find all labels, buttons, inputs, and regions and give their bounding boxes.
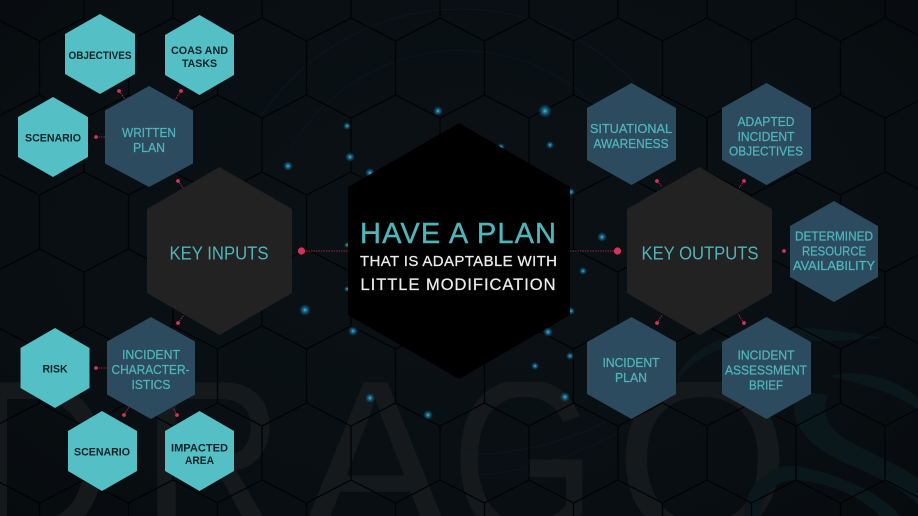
incident assessment brief: [722, 317, 811, 419]
incident characteristics: ISTICS: [132, 378, 170, 392]
adapted incident objectives: [722, 83, 811, 185]
adapted incident objectives: ADAPTED: [738, 115, 794, 129]
objectives: [65, 14, 135, 94]
watermark: DRAGO wordmark: [0, 382, 790, 516]
scenario (written plan): SCENARIO: [25, 132, 81, 144]
incident assessment brief: ASSESSMENT: [725, 364, 807, 378]
determined resource availability: AVAILABILITY: [793, 259, 876, 273]
central subheading: [360, 253, 557, 294]
objectives: OBJECTIVES: [68, 50, 132, 62]
watermark: dragon emblem: [677, 328, 918, 516]
connectors: [96, 91, 744, 415]
scenario (written plan): [18, 97, 88, 177]
incident characteristics: INCIDENT: [122, 348, 180, 362]
incident characteristics: CHARACTER-: [112, 363, 190, 377]
incident assessment brief: INCIDENT: [738, 348, 795, 362]
risk: [20, 328, 90, 408]
incident plan: PLAN: [615, 371, 647, 385]
panel: key outputs: [627, 167, 772, 335]
adapted incident objectives: OBJECTIVES: [729, 144, 803, 158]
incident assessment brief: BRIEF: [749, 378, 783, 392]
written plan: [105, 86, 193, 187]
glowing particles: [283, 104, 607, 420]
panel: key outputs: KEY OUTPUTS: [642, 244, 758, 264]
faint concentric arcs: [262, 9, 660, 475]
situational awareness: [587, 83, 676, 185]
impacted area: [165, 411, 234, 491]
determined resource availability: DETERMINED: [795, 230, 873, 244]
determined resource availability: RESOURCE: [802, 244, 866, 258]
coas and tasks: [165, 15, 234, 95]
scenario (incident): SCENARIO: [74, 446, 130, 458]
risk: RISK: [42, 364, 68, 376]
connector dots: [94, 89, 786, 417]
coas and tasks: COAS AND: [171, 45, 228, 57]
coas and tasks: TASKS: [182, 58, 217, 70]
scenario (incident): [68, 411, 137, 491]
adapted incident objectives: INCIDENT: [738, 130, 795, 144]
written plan: WRITTEN: [122, 126, 176, 140]
impacted area: IMPACTED: [171, 442, 228, 454]
impacted area: AREA: [185, 455, 214, 467]
incident plan: [587, 317, 676, 419]
incident plan: INCIDENT: [602, 356, 660, 370]
situational awareness: SITUATIONAL: [590, 122, 672, 136]
central subheading: THAT IS ADAPTABLE WITH: [360, 253, 557, 270]
panel: key inputs: [147, 167, 292, 335]
panel: key inputs: KEY INPUTS: [170, 244, 268, 264]
situational awareness: AWARENESS: [594, 137, 668, 151]
incident characteristics: [107, 317, 195, 419]
written plan: PLAN: [133, 141, 165, 155]
central hexagon: have a plan: [348, 123, 570, 379]
central subheading: LITTLE MODIFICATION: [360, 276, 556, 294]
central heading: HAVE A PLAN: [360, 218, 556, 250]
determined resource availability: [790, 201, 878, 302]
